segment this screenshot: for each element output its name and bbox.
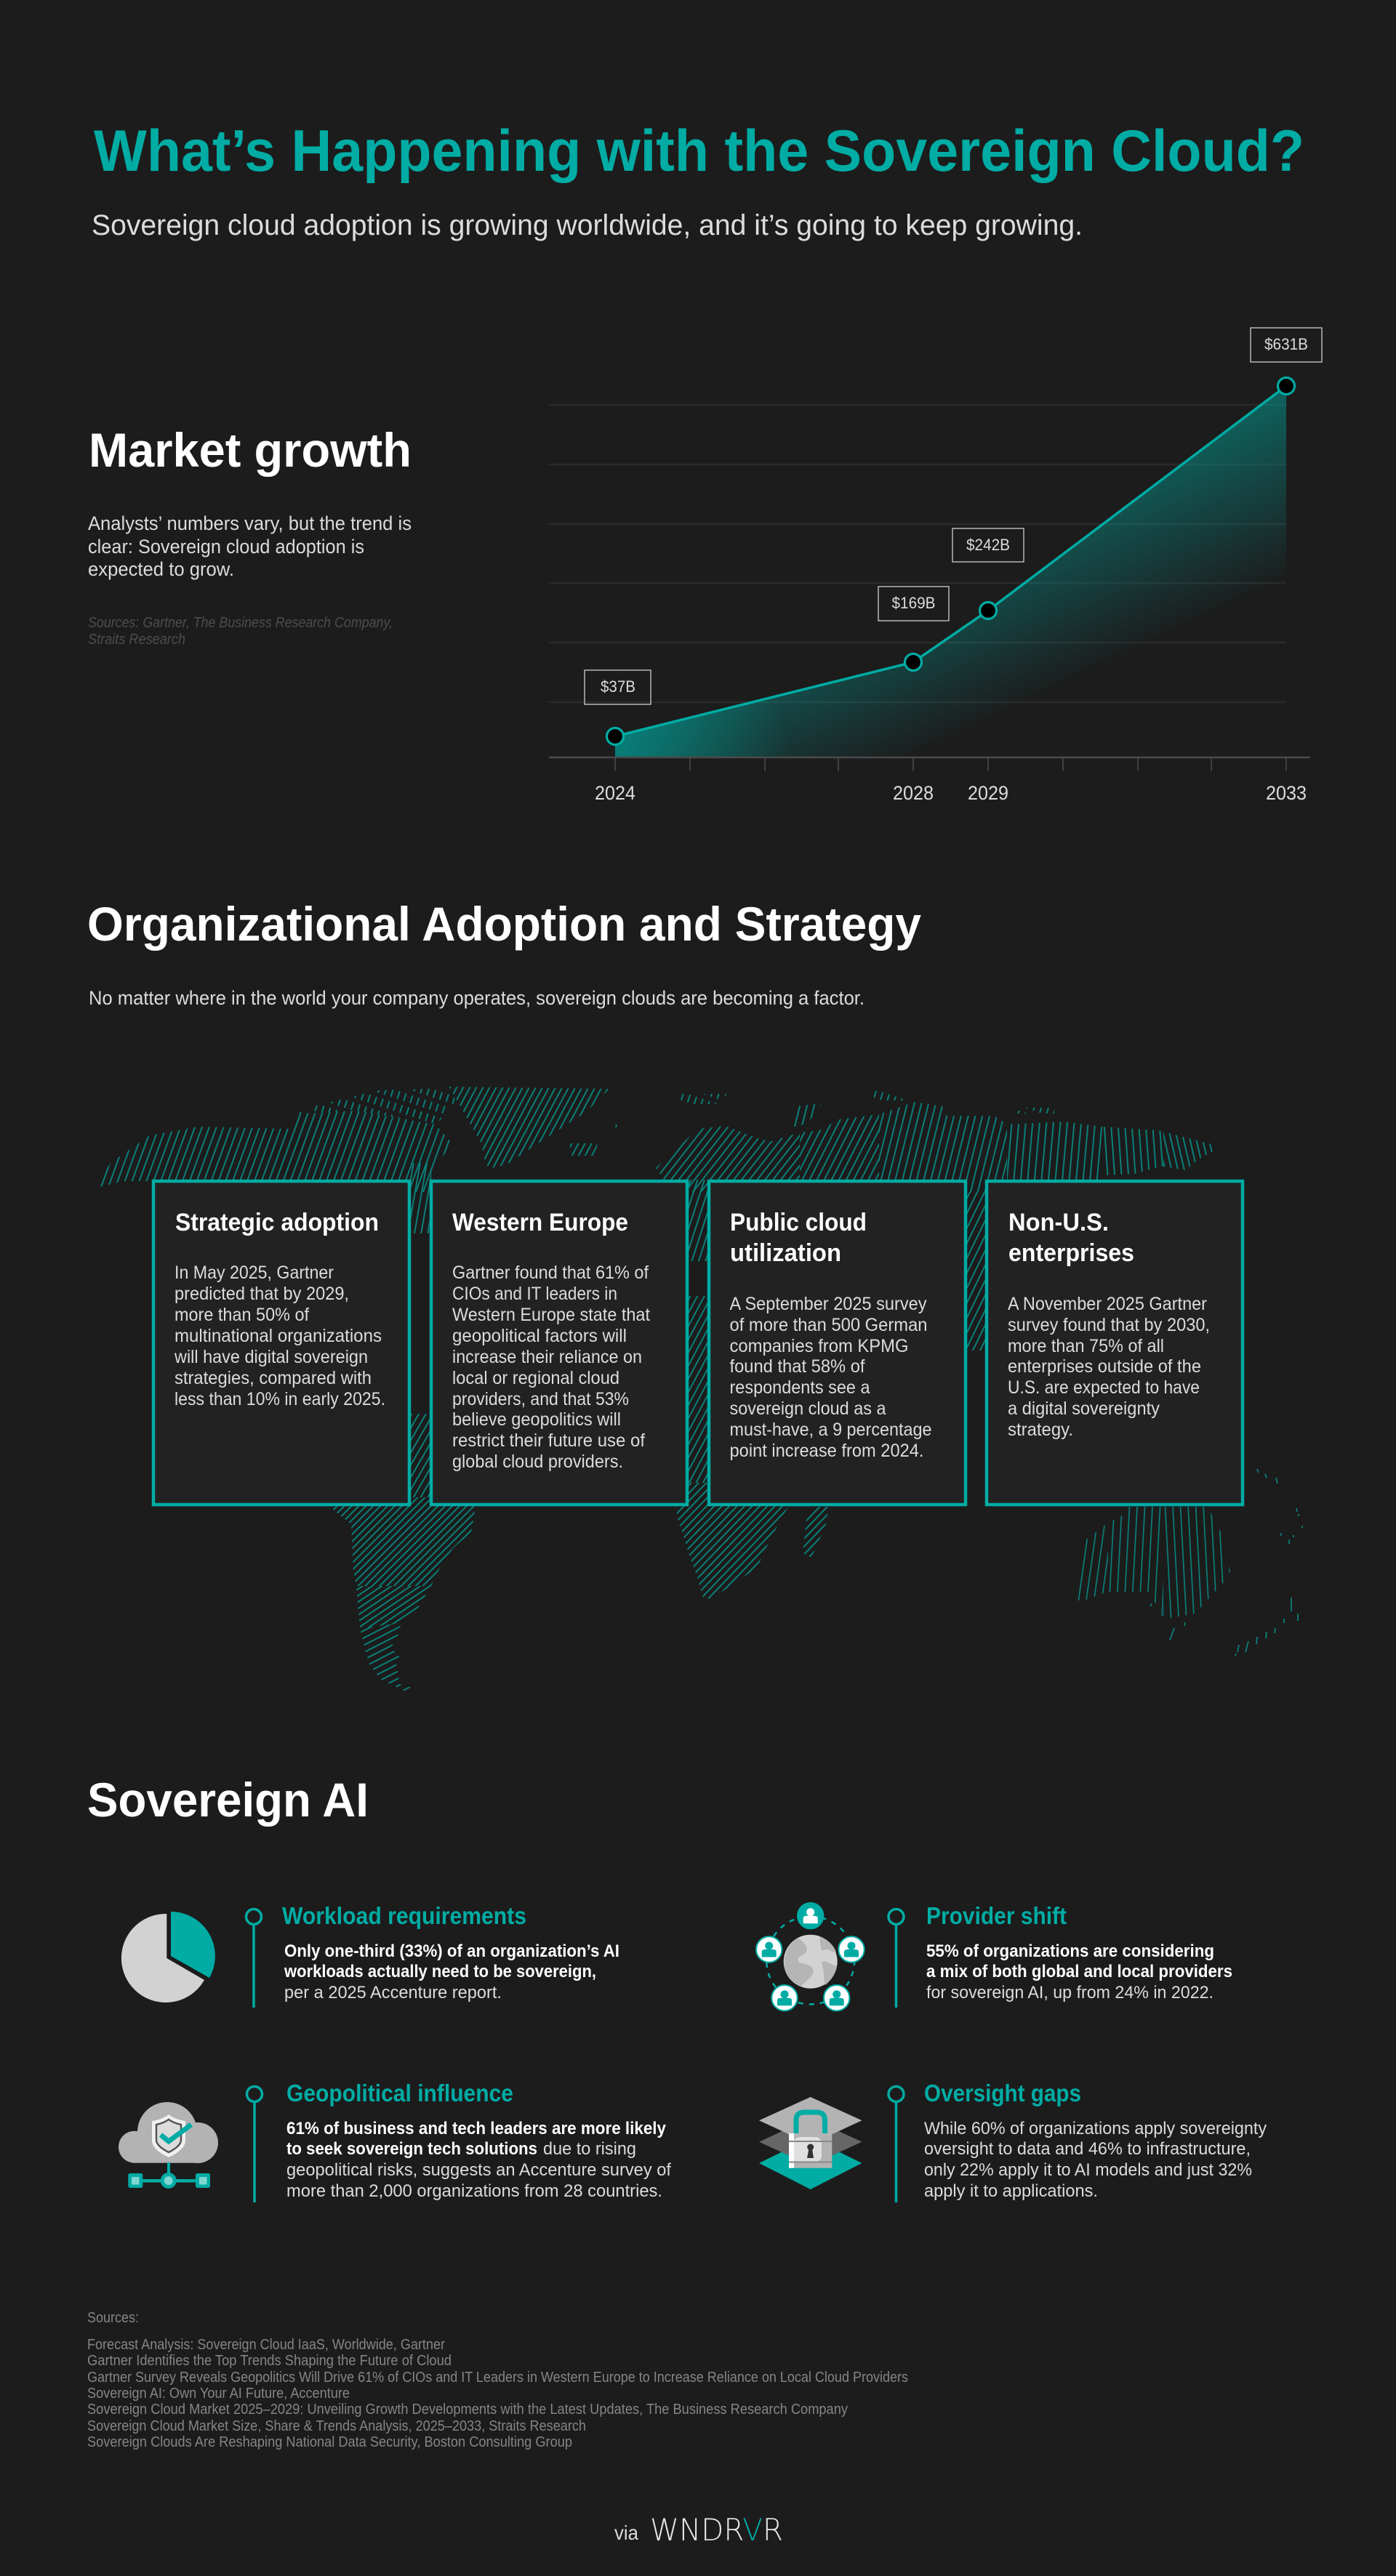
- panel: oversight gaps: [759, 2080, 1267, 2202]
- sources list: Gartner Survey Reveals Geopolitics Will Drive 61% of CIOs and IT Leaders in Western Europe to Increase Reliance on Local Cloud Providers: [87, 2370, 908, 2386]
- item text: more than 2,000 organizations from 28 countries.: [286, 2181, 662, 2201]
- card text: [452, 1263, 650, 1472]
- card heading: Non-U.S.: [1008, 1209, 1109, 1236]
- sources list: [87, 2310, 908, 2450]
- item heading: Provider shift: [926, 1902, 1067, 1929]
- year labels: 2024: [595, 782, 635, 804]
- text block: market growth description: expected to grow.: [88, 558, 234, 580]
- card text: must-have, a 9 percentage: [730, 1420, 932, 1440]
- sources list: Sources:: [87, 2310, 139, 2326]
- card text: geopolitical factors will: [452, 1326, 627, 1346]
- card heading: enterprises: [1008, 1239, 1134, 1267]
- world map hatch background: [94, 1087, 1302, 1692]
- item heading: Geopolitical influence: [286, 2080, 513, 2106]
- text block: chart sources: [88, 615, 393, 648]
- card heading: [730, 1209, 867, 1267]
- sources list: Sovereign Cloud Market 2025–2029: Unveiling Growth Developments with the Latest Updates, The Business Research Company: [87, 2402, 848, 2418]
- text block: market growth description: [88, 512, 412, 580]
- panel: public cloud utilization card: [709, 1181, 966, 1505]
- value labels: $631B: [1264, 335, 1308, 353]
- card text: a digital sovereignty: [1008, 1398, 1160, 1419]
- card text: increase their reliance on: [452, 1347, 642, 1367]
- sources list: Sovereign Clouds Are Reshaping National Data Security, Boston Consulting Group: [87, 2434, 572, 2450]
- chart area fill: [615, 386, 1286, 757]
- text block: chart sources: Straits Research: [88, 632, 185, 648]
- timeline pin: [246, 1909, 262, 2008]
- panel: non-U.S. enterprises card: [987, 1181, 1243, 1505]
- card text: found that 58% of: [730, 1356, 865, 1377]
- item text: [286, 2119, 671, 2201]
- item text: workloads actually need to be sovereign,: [284, 1962, 596, 1981]
- item text: a mix of both global and local providers: [926, 1962, 1232, 1981]
- item text: [284, 1941, 619, 2003]
- text block: market growth description: Analysts’ numbers vary, but the trend is: [88, 512, 412, 534]
- item text: for sovereign AI, up from 24% in 2022.: [926, 1983, 1214, 2003]
- value labels: [585, 328, 1322, 704]
- year labels: [595, 782, 1307, 804]
- card text: point increase from 2024.: [730, 1441, 923, 1461]
- card text: sovereign cloud as a: [730, 1398, 886, 1419]
- year labels: 2029: [968, 782, 1008, 804]
- item text: [926, 1941, 1232, 2003]
- card text: less than 10% in early 2025.: [174, 1389, 385, 1409]
- card text: survey found that by 2030,: [1008, 1315, 1210, 1335]
- item text: Only one-third (33%) of an organization’s AI: [284, 1941, 619, 1961]
- card text: of more than 500 German: [730, 1315, 928, 1335]
- footer: via WNDRVR logo: WNDRVR: [650, 2512, 783, 2548]
- card heading: Western Europe: [452, 1209, 628, 1236]
- heading: market growth: Market growth: [89, 423, 412, 477]
- text block: chart sources: Sources: Gartner, The Business Research Company,: [88, 615, 393, 631]
- item text: [924, 2119, 1267, 2201]
- item text: geopolitical risks, suggests an Accenture survey of: [286, 2160, 671, 2180]
- value labels: $37B: [601, 677, 635, 696]
- item heading: Oversight gaps: [924, 2080, 1081, 2106]
- sources list: Sovereign AI: Own Your AI Future, Accenture: [87, 2386, 350, 2402]
- item text: apply it to applications.: [924, 2181, 1098, 2201]
- item text: 61% of business and tech leaders are more likely: [286, 2119, 666, 2138]
- card text: [1008, 1294, 1210, 1440]
- icon: cloud with shield and network: [119, 2102, 218, 2189]
- card text: strategies, compared with: [174, 1368, 372, 1388]
- card text: more than 50% of: [174, 1305, 309, 1325]
- chart axis and ticks: [549, 757, 1310, 771]
- card text: respondents see a: [730, 1377, 870, 1398]
- card text: providers, and that 53%: [452, 1389, 629, 1409]
- data points: [606, 378, 1294, 744]
- footer: via WNDRVR logo: via: [614, 2521, 638, 2544]
- card text: companies from KPMG: [730, 1336, 909, 1356]
- subtitle: Sovereign cloud adoption is growing worldwide, and it’s going to keep growing.: [92, 209, 1083, 241]
- timeline pin: [247, 2086, 262, 2202]
- card text: A November 2025 Gartner: [1008, 1294, 1207, 1314]
- card heading: Public cloud: [730, 1209, 867, 1236]
- card text: predicted that by 2029,: [174, 1284, 349, 1304]
- panel: strategic adoption card: [153, 1181, 409, 1505]
- item text: due to rising: [543, 2139, 636, 2159]
- card heading: [1008, 1209, 1134, 1267]
- card text: more than 75% of all: [1008, 1336, 1164, 1356]
- card text: CIOs and IT leaders in: [452, 1284, 617, 1304]
- item heading: Workload requirements: [282, 1902, 526, 1929]
- card text: believe geopolitics will: [452, 1409, 621, 1430]
- card text: U.S. are expected to have: [1008, 1377, 1200, 1398]
- panel: workload requirements: [121, 1902, 619, 2008]
- timeline pin: [888, 1909, 904, 2008]
- heading: organizational adoption: Organizational Adoption and Strategy: [87, 897, 921, 951]
- title: What’s Happening with the Sovereign Cloud?: [94, 118, 1304, 184]
- item text: oversight to data and 46% to infrastructure,: [924, 2139, 1251, 2159]
- item text: 55% of organizations are considering: [926, 1941, 1214, 1961]
- card text: local or regional cloud: [452, 1368, 619, 1388]
- card text: enterprises outside of the: [1008, 1356, 1201, 1377]
- panel: provider shift: [756, 1902, 1232, 2011]
- item text: to seek sovereign tech solutions: [286, 2139, 537, 2159]
- item text: While 60% of organizations apply sovereignty: [924, 2119, 1267, 2138]
- text block: market growth description: clear: Sovereign cloud adoption is: [88, 536, 364, 558]
- card text: Gartner found that 61% of: [452, 1263, 649, 1283]
- card heading: utilization: [730, 1239, 841, 1267]
- card heading: Strategic adoption: [175, 1209, 379, 1236]
- item text: per a 2025 Accenture report.: [284, 1983, 502, 2003]
- card text: multinational organizations: [174, 1326, 382, 1346]
- area chart: market growth: [549, 328, 1322, 804]
- card text: [730, 1294, 932, 1461]
- icon: padlock on stacked layers: [759, 2097, 862, 2189]
- timeline pin: [888, 2086, 904, 2202]
- icon: pie chart: [121, 1912, 215, 2003]
- chart line: [615, 386, 1286, 736]
- value labels: $169B: [891, 594, 935, 612]
- card text: will have digital sovereign: [174, 1347, 368, 1367]
- sources list: Forecast Analysis: Sovereign Cloud IaaS, Worldwide, Gartner: [87, 2337, 445, 2353]
- year labels: 2033: [1266, 782, 1307, 804]
- card text: A September 2025 survey: [730, 1294, 927, 1314]
- panel: western europe card: [431, 1181, 687, 1505]
- icon: global network of people: [756, 1902, 865, 2011]
- panel: geopolitical influence: [119, 2080, 671, 2202]
- year labels: 2028: [893, 782, 934, 804]
- card text: restrict their future use of: [452, 1430, 645, 1451]
- text: organizational adoption intro: No matter where in the world your company operates, sovereign clouds are becoming a factor.: [89, 987, 865, 1009]
- card text: In May 2025, Gartner: [174, 1263, 334, 1283]
- sources list: Sovereign Cloud Market Size, Share & Trends Analysis, 2025–2033, Straits Research: [87, 2418, 586, 2434]
- card text: [174, 1263, 385, 1409]
- item text: only 22% apply it to AI models and just 32%: [924, 2160, 1252, 2180]
- card text: Western Europe state that: [452, 1305, 650, 1325]
- heading: sovereign AI: Sovereign AI: [87, 1773, 369, 1827]
- card text: global cloud providers.: [452, 1452, 623, 1472]
- sources list: Gartner Identifies the Top Trends Shaping the Future of Cloud: [87, 2353, 452, 2369]
- panel: market growth text: [88, 423, 412, 648]
- value labels: $242B: [966, 536, 1010, 554]
- card text: strategy.: [1008, 1420, 1073, 1440]
